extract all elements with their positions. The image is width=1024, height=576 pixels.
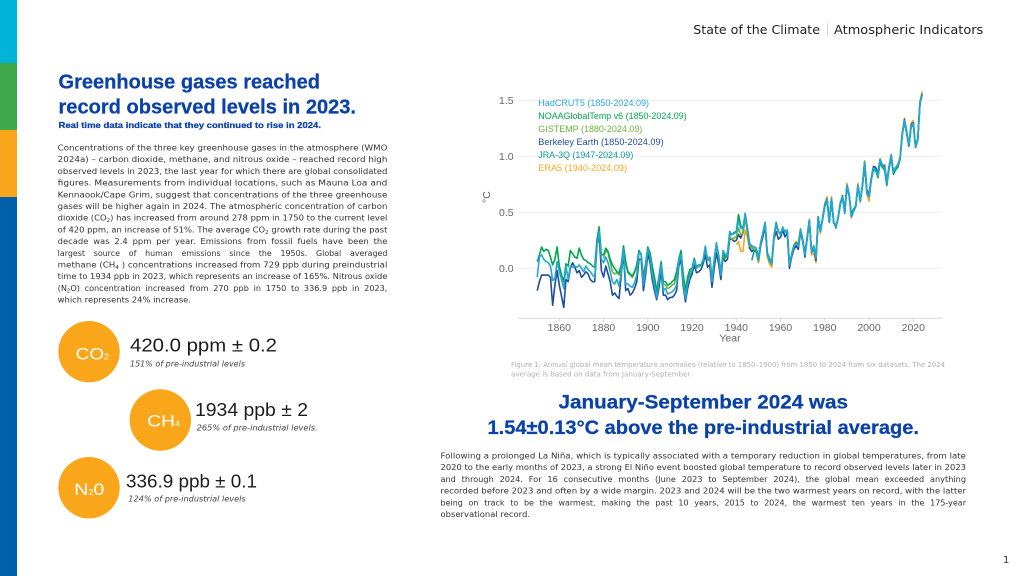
x axis labels: 1860 [548, 322, 571, 334]
y axis labels: 0.0 [499, 263, 514, 275]
CH4 value: 1934 ppb ± 2 [195, 399, 308, 420]
y axis labels: 0.5 [499, 207, 514, 219]
x axis labels: 1900 [636, 322, 660, 334]
text block: temperature context: and through 2024. For 16 consecutive months (June 2023 to September 2024), the global mean exceeded anything [440, 475, 966, 484]
text block: greenhouse gas concentrations: observed levels in 2023, the last year for which there are global consolidated [58, 167, 388, 176]
text block: greenhouse gas concentrations: largest source of human emissions since the 1950s. Global averaged [58, 249, 388, 258]
text block: temperature context: Following a prolonged La Niña, which is typically associated with a temporary reduction in global temperatures, from late [440, 452, 966, 460]
series: HadCRUT5 [537, 95, 922, 299]
series: GISTEMP [604, 95, 922, 293]
icon: N2O circle [58, 457, 120, 518]
text block: greenhouse gas concentrations: which represents 24% increase. [58, 296, 191, 305]
heading: January-September 2024 [488, 392, 919, 439]
header [693, 23, 983, 37]
x axis labels [548, 322, 925, 334]
y axis title: °C [481, 191, 493, 203]
CO2 note: 151% of pre-industrial levels [130, 360, 245, 369]
x axis labels: 1960 [769, 322, 792, 334]
text block: greenhouse gas concentrations: of 420 ppm, an increase of 51%. The average CO [58, 225, 245, 234]
y axis labels [499, 95, 514, 275]
x axis labels: 2020 [902, 322, 925, 334]
header: State of the Climate [693, 23, 820, 37]
header: Atmospheric Indicators [834, 23, 983, 37]
text block: greenhouse gas concentrations: 2024a) – carbon dioxide, methane, and nitrous oxide – reached record high [58, 155, 388, 164]
series: ERA5 [736, 91, 922, 267]
figure caption [511, 361, 945, 378]
text block: greenhouse gas concentrations: 2 [67, 288, 70, 294]
data lines [537, 91, 922, 307]
x axis labels: 2000 [857, 322, 881, 334]
x axis labels: 1940 [725, 322, 748, 334]
heading: January-September 2024: January-September 2024 was [558, 392, 848, 413]
text block: temperature context: recorded before 2023 and often by a wide margin. 2023 and 2024 will be the two warmest years on record, with the latter [440, 487, 967, 496]
page number: 1 [1003, 555, 1009, 566]
line chart: global mean temperature anomalies [481, 91, 942, 344]
CO2 value: 420.0 ppm ± 0.2 [130, 335, 277, 356]
text block: greenhouse gas concentrations: methane (CH [58, 260, 108, 270]
subtitle: Real time data indicate that they continued to rise in 2024. [58, 120, 321, 130]
indicator: N2O [58, 457, 257, 518]
text block: greenhouse gas concentrations: ) has increased from around 278 ppm in 1750 to the current level [110, 214, 387, 223]
N2O value: 336.9 ppb ± 0.1 [126, 471, 257, 492]
title: greenhouse gases [58, 71, 356, 118]
icon: N2O circle: N20 [74, 480, 104, 499]
title: greenhouse gases: record observed levels in 2023. [58, 96, 356, 118]
legend: HadCRUT5 (1850-2024.09) [538, 98, 649, 109]
series: JRA-3Q [752, 95, 922, 265]
text block: greenhouse gas concentrations: time to 1934 ppb in 2023, which represents an increase of 165%. Nitrous oxide [58, 272, 388, 281]
icon: CH4 circle [130, 389, 191, 451]
icon: CH4 circle: CH 4 [147, 412, 181, 431]
text block: greenhouse gas concentrations: O) concentration increased from 270 ppb in 1750 to 336.9 ppb in 2023, [70, 284, 387, 293]
series: NOAAGlobalTemp v6 [537, 94, 922, 291]
text block: temperature context: 2020 to the early months of 2023, a strong El Niño event boosted global temperature to record observed levels later in 2023 [440, 463, 966, 472]
text block: greenhouse gas concentrations: dioxide (CO [58, 214, 102, 223]
text block: temperature context: observational record. [440, 510, 530, 519]
sidebar colour stripe [0, 0, 17, 576]
text block: greenhouse gas concentrations: growth rate during the past [269, 225, 387, 234]
text block: greenhouse gas concentrations: 4 [115, 265, 119, 271]
icon: CO2 circle [58, 321, 120, 382]
text block: greenhouse gas concentrations: Kennaook/Cape Grim, suggest that concentrations of the three greenhouse [58, 190, 388, 199]
legend: JRA-3Q (1947-2024.09) [538, 150, 633, 161]
text block: greenhouse gas concentrations: ) concentrations increased from 729 ppb during preindustrial [119, 260, 387, 270]
figure caption: Figure 1: Annual global mean temperature anomalies (relative to 1850–1900) from 1850 to 2024 from six datasets. The 2024 [511, 361, 945, 369]
text block: greenhouse gas concentrations: 2 [265, 230, 269, 236]
text block: greenhouse gas concentrations: figures. Measurements from individual locations, such as Mauna Loa and [58, 179, 388, 188]
title: greenhouse gases: Greenhouse gases reached [58, 71, 320, 93]
text block: greenhouse gas concentrations: 2 [107, 218, 110, 224]
text block: greenhouse gas concentrations: Concentrations of the three key greenhouse gases in the atmosphere (WMO [58, 144, 387, 152]
y axis labels: 1.5 [499, 95, 514, 107]
text block: temperature context: being on track to be the warmest, making the past 10 years, 2015 to 2024, the warmest ten years in the 175-year [440, 498, 967, 507]
N2O note: 124% of pre-industrial levels [128, 495, 246, 504]
x axis labels: 1880 [592, 322, 615, 334]
figure caption: average is based on data from January-September. [511, 370, 692, 378]
legend: GISTEMP (1880-2024.09) [538, 124, 642, 135]
text block: temperature context [440, 452, 967, 519]
series: Berkeley Earth [537, 95, 922, 308]
text block: greenhouse gas concentrations: (N [58, 284, 66, 293]
x axis labels: 1980 [813, 322, 837, 334]
indicator: CO2 [58, 321, 277, 382]
text block: greenhouse gas concentrations: decade was 2.4 ppm per year. Emissions from fossil fuels have been the [58, 237, 388, 246]
legend [538, 98, 687, 174]
indicator: CH4 [130, 389, 318, 451]
legend: NOAAGlobalTemp v6 (1850-2024.09) [538, 111, 687, 122]
icon: CO2 circle: CO 2 [76, 344, 110, 363]
heading: January-September 2024: 1.54±0.13°C above the pre-industrial average. [488, 418, 919, 439]
x axis title: Year [719, 332, 741, 344]
CH4 note: 265% of pre-industrial levels. [197, 424, 318, 433]
text block: greenhouse gas concentrations [58, 144, 388, 305]
legend: ERA5 (1940-2024.09) [538, 163, 627, 174]
x axis labels: 1920 [680, 322, 704, 334]
text block: greenhouse gas concentrations: gases will be higher again in 2024. The atmospheric concentration of carbon [58, 202, 388, 211]
legend: Berkeley Earth (1850-2024.09) [538, 137, 664, 148]
y axis labels: 1.0 [499, 151, 514, 163]
